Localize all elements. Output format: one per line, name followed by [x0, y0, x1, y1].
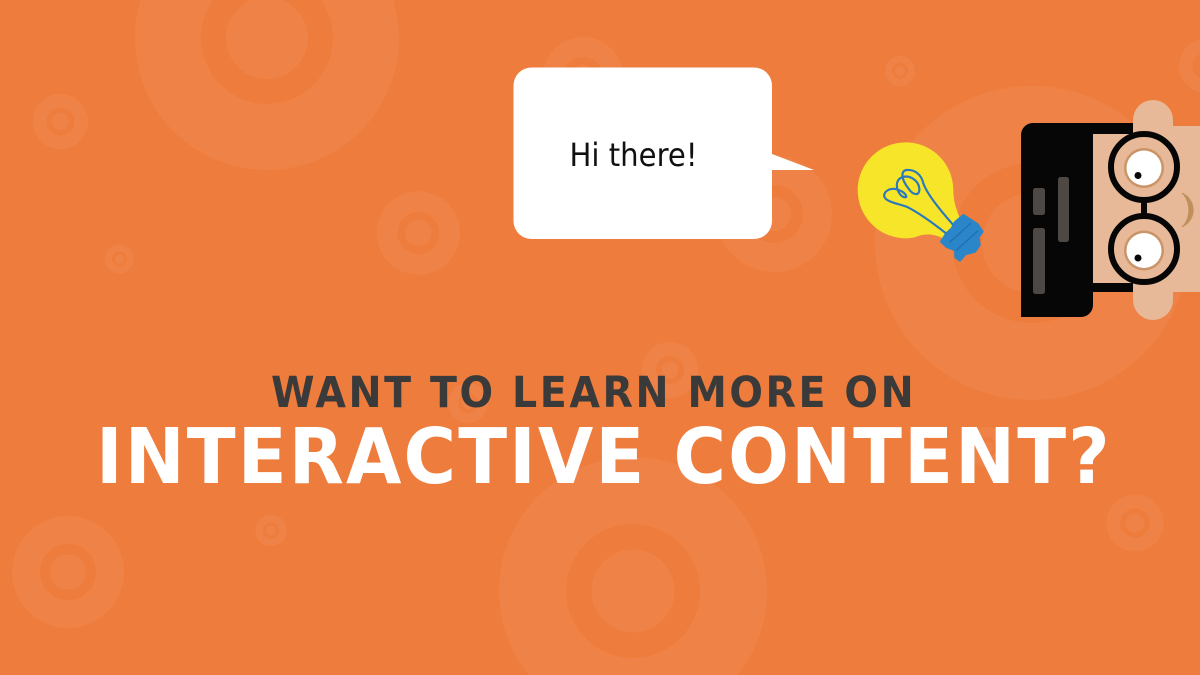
icon: light bulb	[858, 142, 983, 261]
heading: want to learn more on: WANT TO LEARN MORE ON	[271, 368, 914, 417]
glasses	[1111, 134, 1177, 282]
heading: interactive content: INTERACTIVE CONTENT?	[96, 412, 1110, 502]
hair	[1021, 123, 1140, 317]
eye: top	[1124, 148, 1164, 188]
character peeking from the right	[1021, 100, 1200, 320]
nose	[1182, 193, 1193, 227]
eye: bottom	[1124, 230, 1164, 270]
hair streaks	[1033, 177, 1069, 294]
speech bubble	[514, 68, 814, 239]
face	[1093, 100, 1200, 320]
speech bubble text: Hi there!	[570, 136, 698, 174]
